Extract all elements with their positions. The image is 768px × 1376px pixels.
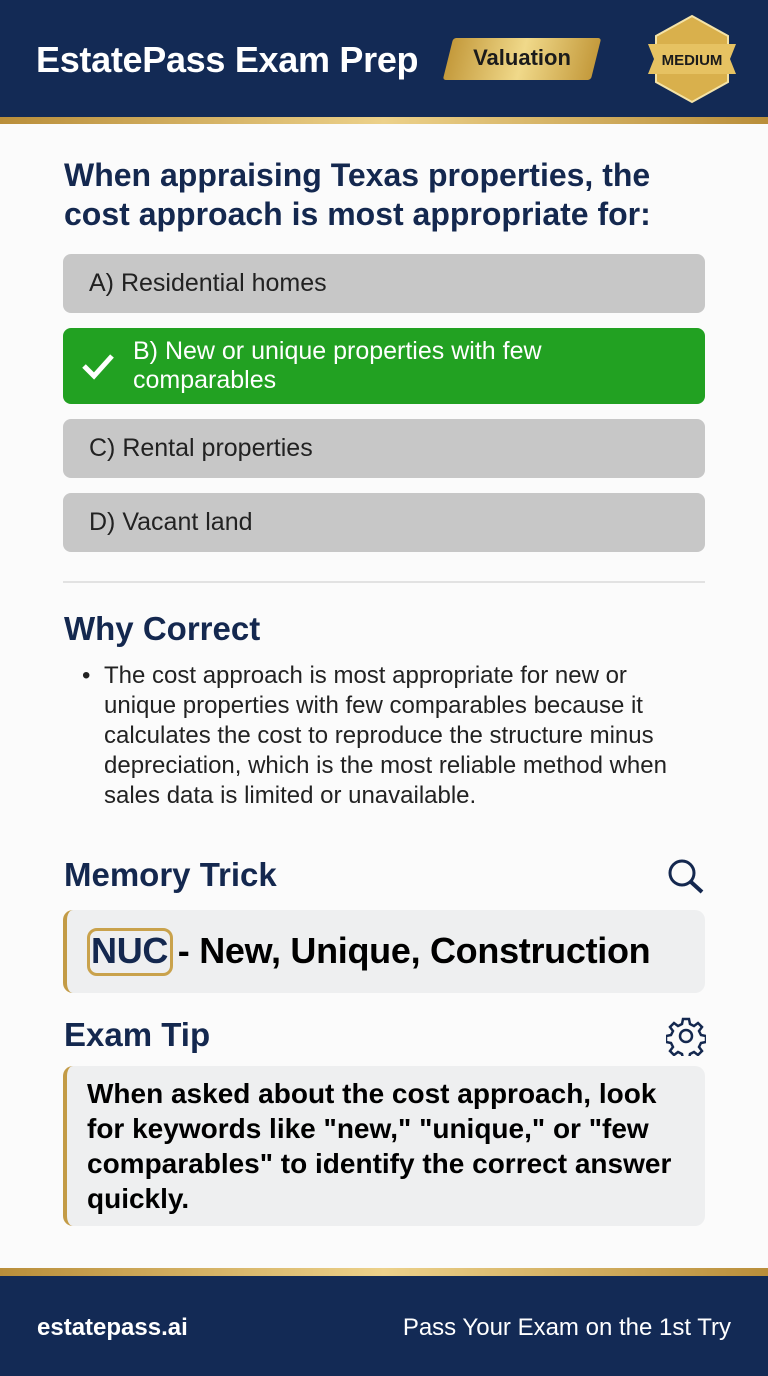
- option D: D) Vacant land: [89, 508, 253, 536]
- explanation: •: [82, 662, 90, 689]
- memory box: NUC - New, Unique, Construction: [91, 930, 650, 971]
- option B correct: [63, 328, 705, 404]
- option A: [63, 254, 705, 313]
- option D: [63, 493, 705, 552]
- heading: why correct: Why Correct: [64, 610, 260, 647]
- memory box: [63, 910, 705, 993]
- badge text: Valuation: [473, 45, 571, 70]
- exam tip box: When asked about the cost approach, look for keywords like "new," "unique," or "few comparables" to identify the correct answer quickly.: [87, 1078, 671, 1214]
- heading: exam tip: Exam Tip: [64, 1016, 210, 1053]
- icon: gear: [666, 1018, 706, 1056]
- footer url: estatepass.ai: [37, 1314, 188, 1341]
- option C: C) Rental properties: [89, 434, 313, 462]
- badge: medium: MEDIUM: [662, 52, 722, 69]
- icon: magnifier: [668, 860, 704, 894]
- badge: Valuation: [443, 38, 601, 80]
- explanation: The cost approach is most appropriate for new or unique properties with few comparables because it calculates the cost to reproduce the structure minus depreciation, which is the most reliable method when sales data is limited or unavailable.: [104, 662, 667, 809]
- icon: check: [82, 354, 114, 380]
- title: EstatePass Exam Prep: [36, 39, 418, 80]
- tagline: Pass Your Exam on the 1st Try: [403, 1314, 731, 1341]
- option B correct: B) New or unique properties with few comparables: [133, 337, 542, 394]
- NUC highlight: [87, 928, 173, 976]
- heading: memory trick: Memory Trick: [64, 856, 277, 893]
- option C: [63, 419, 705, 478]
- question: When appraising Texas properties, the cost approach is most appropriate for:: [64, 157, 651, 232]
- header: [0, 0, 768, 118]
- badge: medium: [648, 14, 736, 104]
- footer: [0, 1268, 768, 1276]
- option A: A) Residential homes: [89, 269, 327, 297]
